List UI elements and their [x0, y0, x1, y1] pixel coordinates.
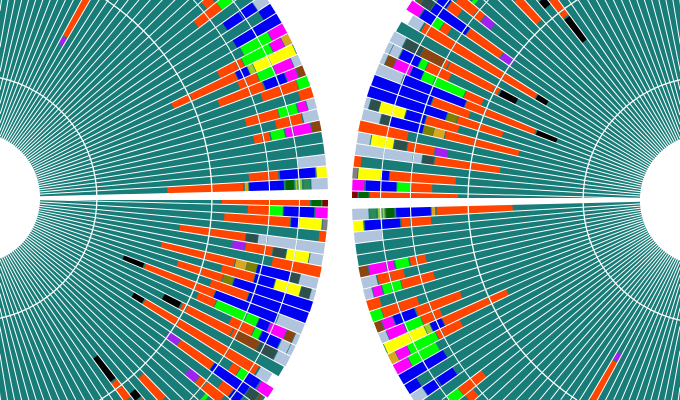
bars: lower left quadrant [95, 200, 328, 400]
teal base disc [0, 0, 327, 400]
bars: upper left quadrant [61, 0, 328, 190]
chart: left radial stacked bars [0, 0, 340, 400]
chart: right radial stacked bars (rotated copy) [340, 0, 680, 400]
centre hub [0, 137, 40, 259]
spokes: thin white separators, upper half [0, 0, 335, 195]
spokes: thin white separators, lower half [0, 200, 336, 400]
axis rings [0, 0, 299, 400]
horizontal white gap [0, 189, 340, 200]
